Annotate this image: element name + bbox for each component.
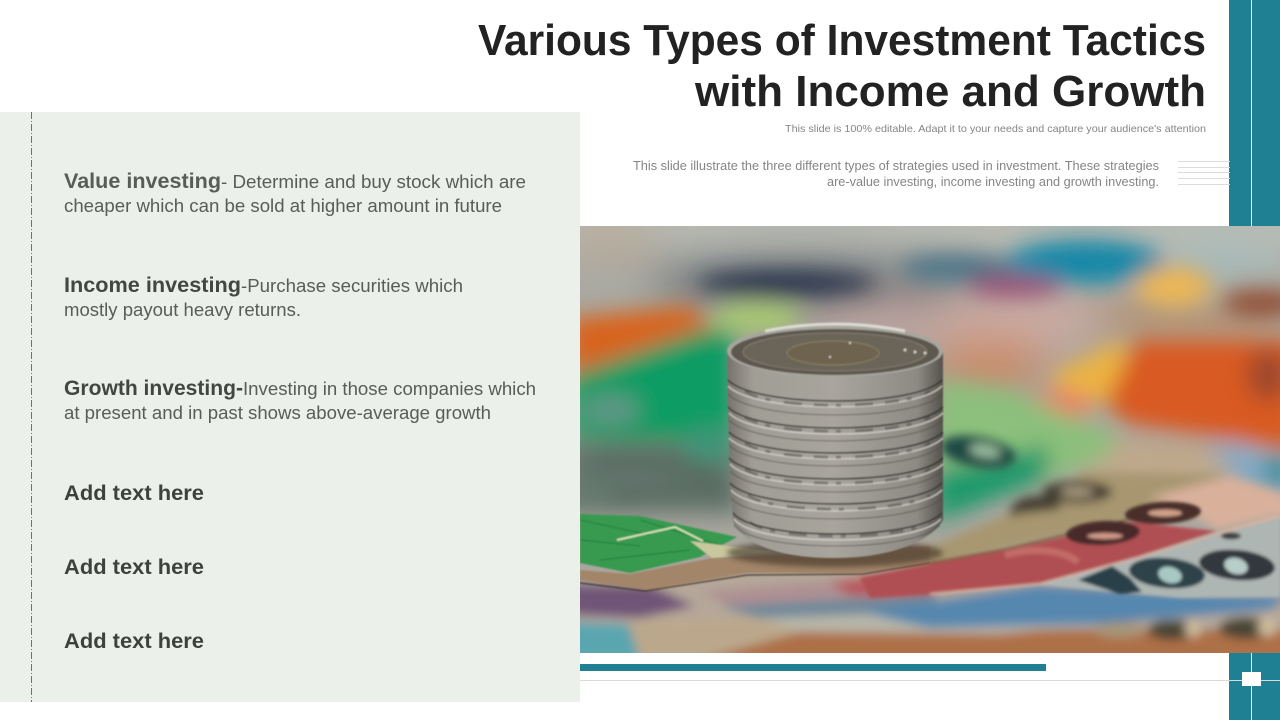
add text placeholder 2: Add text here [64,556,204,579]
subtitle note: This slide is 100% editable. Adapt it to your needs and capture your audience's attention [785,123,1206,135]
red note [860,522,1217,598]
value investing text: Value investing [64,170,221,193]
description text: are-value investing, income investing and growth investing. [827,175,1159,189]
growth investing text: Investing in those companies which [243,378,536,399]
white square marker [1242,672,1261,686]
description text: This slide illustrate the three different types of strategies used in investment. These strategies [633,159,1159,173]
income investing text: -Purchase securities which [241,275,463,296]
title: Various Types of Investment Tactics [478,16,1206,65]
decorative lines [1178,161,1230,185]
coin stack [727,324,943,567]
teal accent bar [580,664,1046,671]
value investing text: - Determine and buy stock which are [221,171,526,192]
bottom rule [580,680,1280,681]
title [478,16,1206,116]
grey note [1040,518,1280,598]
growth investing text: Growth investing- [64,377,243,400]
growth investing text: at present and in past shows above-average growth [64,402,491,423]
income investing text: Income investing [64,274,241,297]
digits: 50 [1124,500,1202,526]
photo: coin stack on banknotes [580,226,1280,653]
income investing text: mostly payout heavy returns. [64,299,301,320]
description text [633,159,1159,189]
title: with Income and Growth [694,67,1206,116]
add text placeholder 3: Add text here [64,630,204,653]
green note [580,514,737,573]
right teal column [1229,0,1280,720]
panel: investing types [0,112,580,702]
tan note [580,546,930,590]
value investing text: cheaper which can be sold at higher amount in future [64,195,502,216]
add text placeholder 1: Add text here [64,482,204,505]
digits: 100 [1198,547,1276,583]
